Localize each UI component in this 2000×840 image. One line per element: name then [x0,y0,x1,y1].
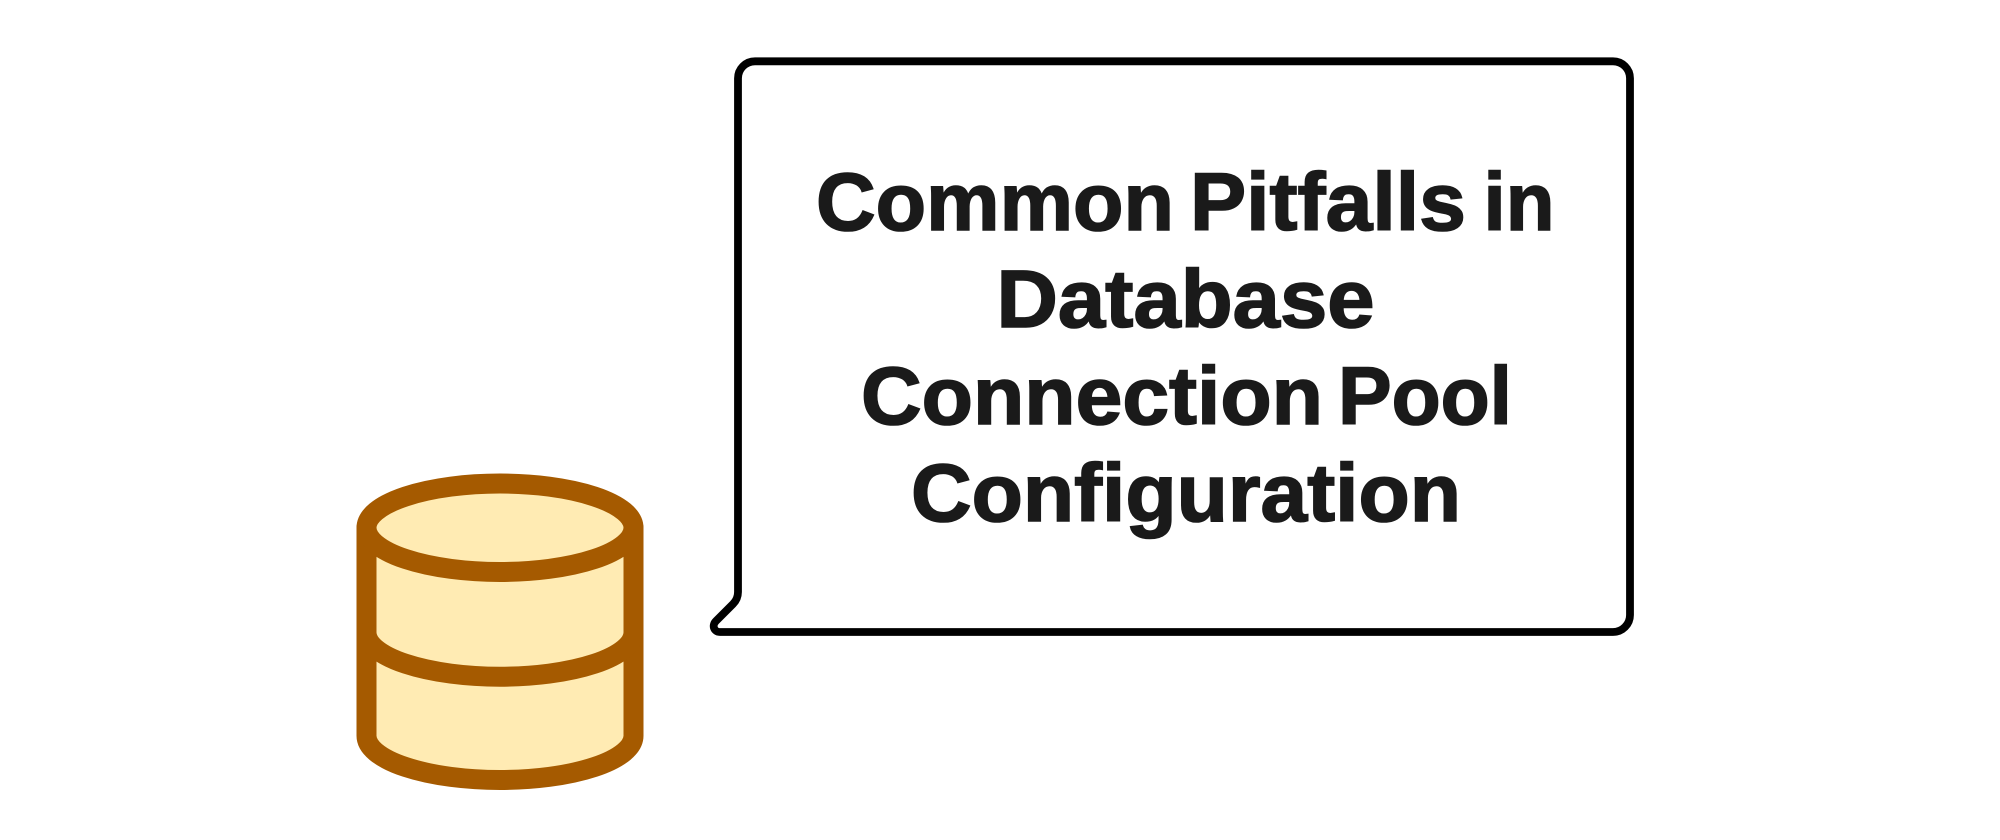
title line 3 [861,351,1512,442]
title [816,157,1554,539]
icon: database cylinder [366,484,634,780]
title line 4: Configuration [911,448,1461,539]
title line 1 [816,157,1554,248]
title line 2: Database [996,254,1374,345]
speech bubble [714,61,1630,632]
title line 1: Common [816,157,1174,248]
title line 1: Pitfalls [1190,157,1466,248]
title line 1: in [1484,157,1554,248]
title line 3: Pool [1338,351,1512,442]
title line 3: Connection [861,351,1323,442]
